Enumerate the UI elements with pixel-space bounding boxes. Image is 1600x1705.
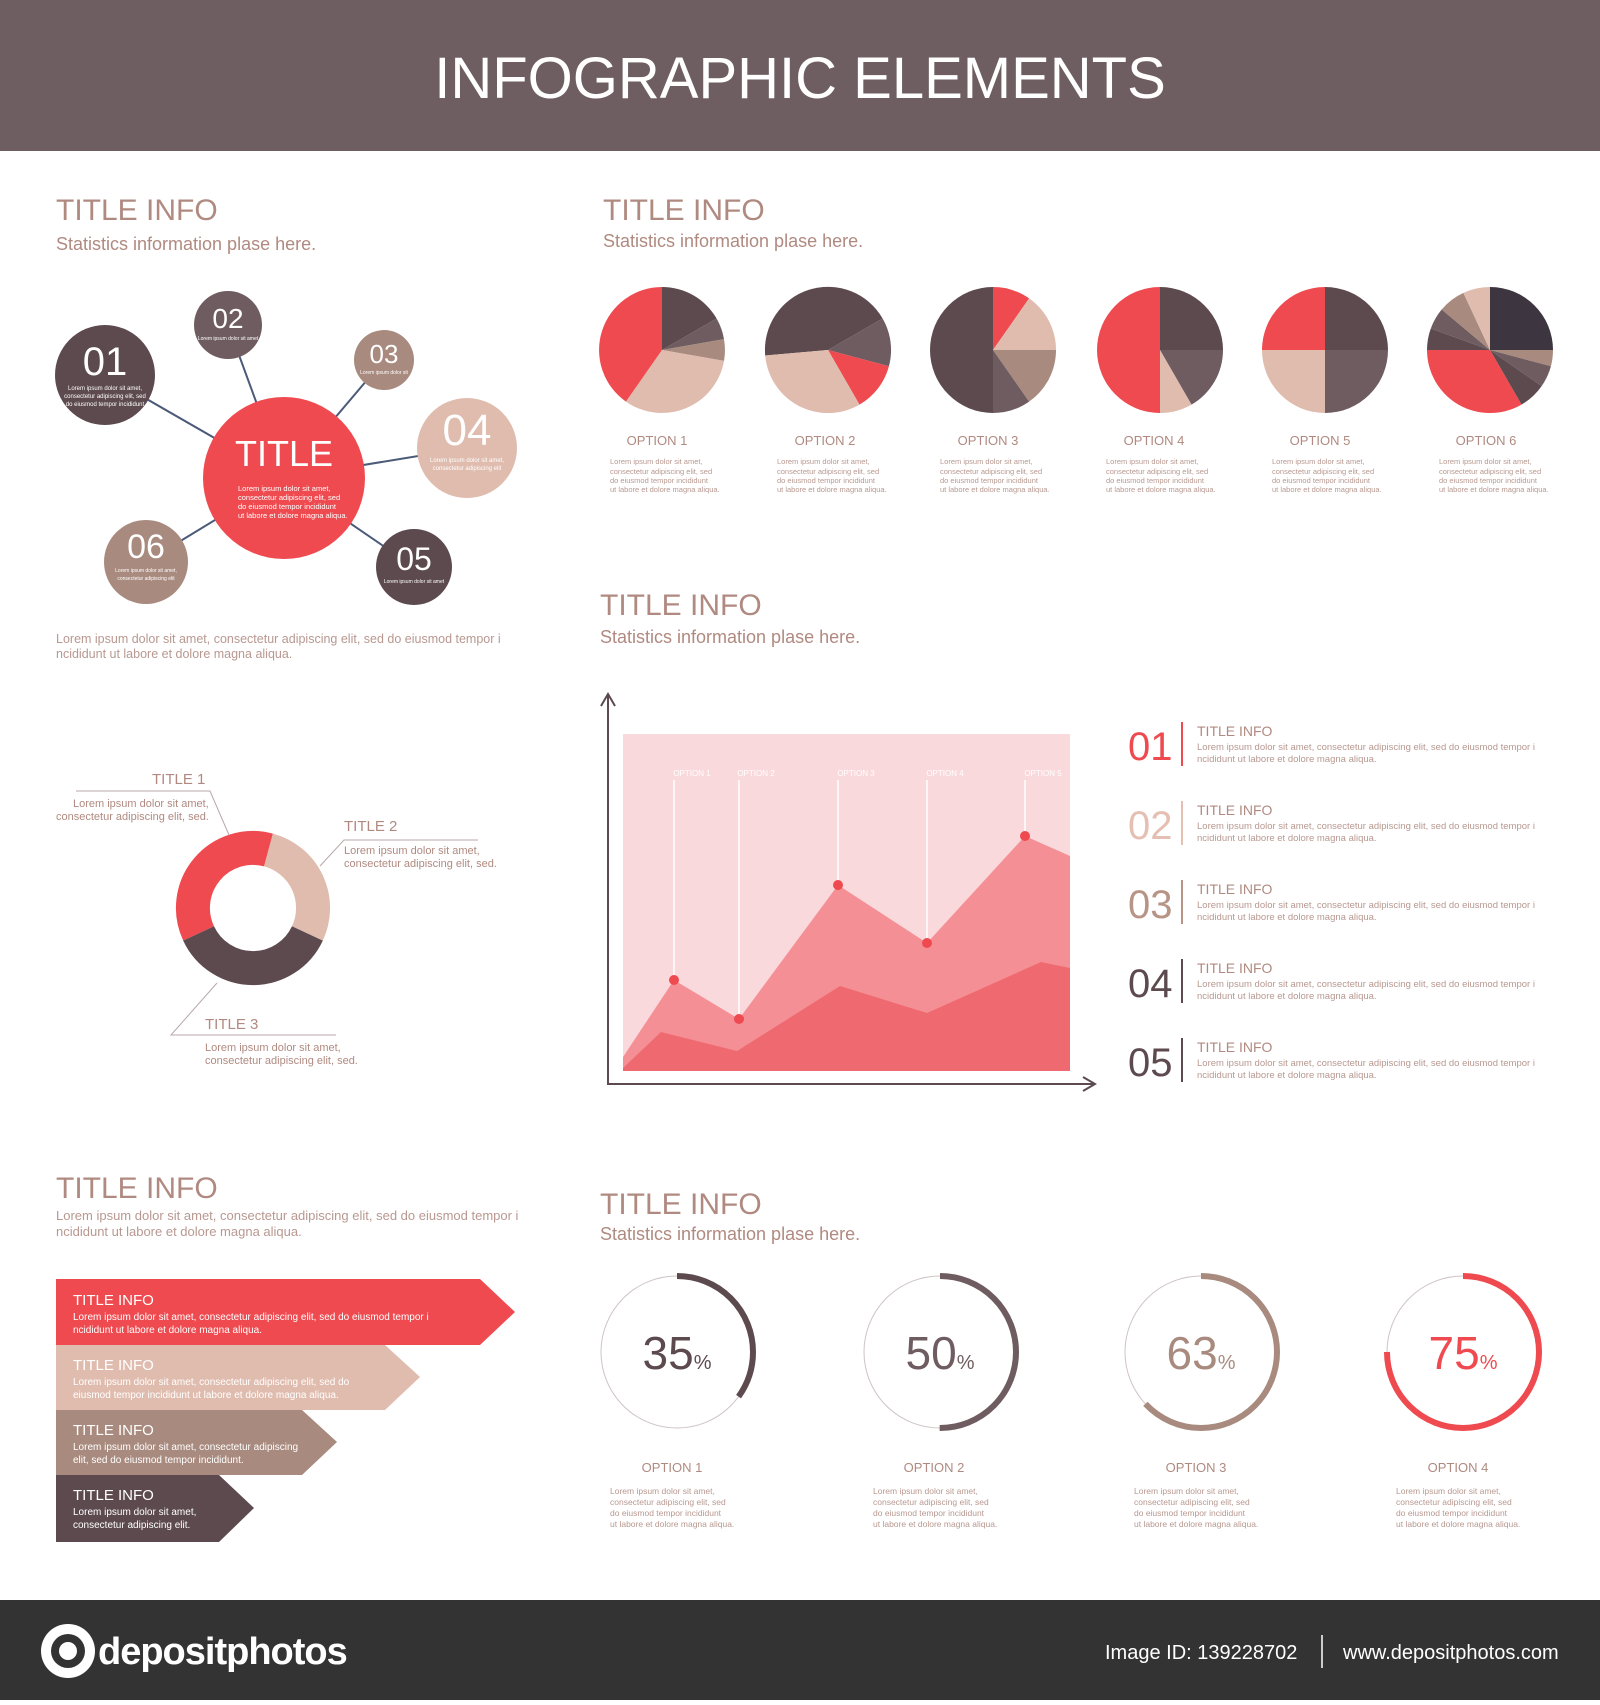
numbered list: TITLE INFO xyxy=(1197,723,1273,739)
pie labels: do eiusmod tempor incididunt xyxy=(1106,476,1205,485)
pie labels: ut labore et dolore magna aliqua. xyxy=(940,485,1050,494)
node 02: Lorem ipsum dolor sit amet xyxy=(198,336,259,342)
progress rings: OPTION 4 xyxy=(1428,1460,1488,1475)
numbered list: 05 xyxy=(1128,1041,1172,1085)
arrow bars: Lorem ipsum dolor sit amet, consectetur adipiscing elit, sed do xyxy=(73,1377,350,1388)
pie labels: OPTION 4 xyxy=(1124,433,1184,448)
section heading: network: Statistics information plase here. xyxy=(56,234,316,254)
progress rings: OPTION 3 xyxy=(1166,1460,1226,1475)
central title node: consectetur adipiscing elit, sed xyxy=(238,493,340,502)
section heading: arrows: ncididunt ut labore et dolore magna aliqua. xyxy=(56,1224,302,1239)
numbered list: TITLE INFO xyxy=(1197,1039,1273,1055)
donut chart xyxy=(56,771,497,1067)
pie labels: do eiusmod tempor incididunt xyxy=(940,476,1039,485)
pie charts row xyxy=(599,287,1553,413)
numbered list xyxy=(1128,722,1535,1085)
pie labels: consectetur adipiscing elit, sed xyxy=(610,467,712,476)
node 01: consectetur adipiscing elit, sed xyxy=(64,394,146,400)
pie labels: ut labore et dolore magna aliqua. xyxy=(777,485,887,494)
donut labels: Lorem ipsum dolor sit amet, xyxy=(205,1042,341,1054)
donut labels: TITLE 2 xyxy=(344,818,397,835)
network diagram xyxy=(55,291,517,605)
progress rings: ut labore et dolore magna aliqua. xyxy=(1134,1519,1258,1529)
area chart xyxy=(601,694,1095,1091)
node 04: 04 xyxy=(443,406,491,455)
progress rings: do eiusmod tempor incididunt xyxy=(610,1508,722,1518)
header bar xyxy=(0,0,1600,151)
donut labels: Lorem ipsum dolor sit amet, xyxy=(344,845,480,857)
progress rings: do eiusmod tempor incididunt xyxy=(1134,1508,1246,1518)
donut labels: TITLE 1 xyxy=(152,771,205,788)
network caption: ncididunt ut labore et dolore magna aliqua. xyxy=(56,647,292,661)
footer bar: Image ID: 139228702 xyxy=(1105,1642,1297,1664)
pie labels: Lorem ipsum dolor sit amet, xyxy=(940,457,1033,466)
node 03 xyxy=(354,330,414,390)
area chart: OPTION 1 xyxy=(673,769,711,778)
progress rings: OPTION 2 xyxy=(904,1460,964,1475)
section heading: pies: Statistics information plase here. xyxy=(603,231,863,251)
arrow bars: Lorem ipsum dolor sit amet, xyxy=(73,1507,196,1518)
arrow bars: TITLE INFO xyxy=(73,1487,154,1504)
numbered list: TITLE INFO xyxy=(1197,960,1273,976)
central title node: ut labore et dolore magna aliqua. xyxy=(238,511,348,520)
central title node: Lorem ipsum dolor sit amet, xyxy=(238,484,331,493)
node 01: Lorem ipsum dolor sit amet, xyxy=(68,386,142,392)
progress rings: Lorem ipsum dolor sit amet, xyxy=(1134,1486,1239,1496)
section heading: progress rings: Statistics information plase here. xyxy=(600,1224,860,1244)
pie labels: Lorem ipsum dolor sit amet, xyxy=(1439,457,1532,466)
pie 4 xyxy=(1097,287,1223,413)
node 01: 01 xyxy=(83,340,127,384)
donut labels: TITLE 3 xyxy=(205,1016,258,1033)
footer bar xyxy=(0,1600,1600,1700)
section heading: area chart xyxy=(600,589,860,647)
progress rings: consectetur adipiscing elit, sed xyxy=(1396,1497,1512,1507)
progress rings xyxy=(601,1276,1539,1529)
axes xyxy=(601,694,1095,1091)
pie labels: OPTION 5 xyxy=(1290,433,1350,448)
numbered list: Lorem ipsum dolor sit amet, consectetur adipiscing elit, sed do eiusmod tempor i xyxy=(1197,979,1535,990)
pie labels: OPTION 6 xyxy=(1456,433,1516,448)
footer bar: www.depositphotos.com xyxy=(1342,1642,1559,1664)
pie 6 xyxy=(1427,287,1553,413)
arrow bars: Lorem ipsum dolor sit amet, consectetur adipiscing xyxy=(73,1442,298,1453)
section heading: arrows: Lorem ipsum dolor sit amet, consectetur adipiscing elit, sed do eiusmod tempor i xyxy=(56,1208,519,1223)
arrow bars: elit, sed do eiusmod tempor incididunt. xyxy=(73,1455,244,1466)
arrow bars: eiusmod tempor incididunt ut labore et dolore magna aliqua. xyxy=(73,1390,339,1401)
pie labels: Lorem ipsum dolor sit amet, xyxy=(1106,457,1199,466)
node 02 xyxy=(194,291,262,359)
arrow bars: Lorem ipsum dolor sit amet, consectetur adipiscing elit, sed do eiusmod tempor i xyxy=(73,1312,429,1323)
pie labels: ut labore et dolore magna aliqua. xyxy=(610,485,720,494)
node 03: Lorem ipsum dolor sit xyxy=(360,370,409,376)
progress rings: consectetur adipiscing elit, sed xyxy=(1134,1497,1250,1507)
node 04: consectetur adipiscing elit xyxy=(433,466,502,472)
arrow bars: consectetur adipiscing elit. xyxy=(73,1520,190,1531)
numbered list: 01 xyxy=(1128,725,1172,769)
progress rings: Lorem ipsum dolor sit amet, xyxy=(873,1486,978,1496)
title: INFOGRAPHIC ELEMENTS xyxy=(434,46,1166,111)
area chart: OPTION 5 xyxy=(1024,769,1062,778)
section heading: progress rings xyxy=(600,1188,860,1244)
pie 5 xyxy=(1262,287,1388,413)
node 01 xyxy=(55,325,155,425)
pie labels: consectetur adipiscing elit, sed xyxy=(1106,467,1208,476)
numbered list: ncididunt ut labore et dolore magna aliqua. xyxy=(1197,1070,1377,1081)
numbered list: Lorem ipsum dolor sit amet, consectetur adipiscing elit, sed do eiusmod tempor i xyxy=(1197,1058,1535,1069)
node 04: Lorem ipsum dolor sit amet, xyxy=(430,458,504,464)
numbered list: Lorem ipsum dolor sit amet, consectetur adipiscing elit, sed do eiusmod tempor i xyxy=(1197,821,1535,832)
pie labels: OPTION 2 xyxy=(795,433,855,448)
icon: camera logo xyxy=(41,1624,95,1678)
pie labels: do eiusmod tempor incididunt xyxy=(610,476,709,485)
progress rings: do eiusmod tempor incididunt xyxy=(1396,1508,1508,1518)
numbered list: 02 xyxy=(1128,804,1172,848)
pie labels: consectetur adipiscing elit, sed xyxy=(940,467,1042,476)
node 03: 03 xyxy=(370,339,398,369)
pie labels: Lorem ipsum dolor sit amet, xyxy=(610,457,703,466)
node 06 xyxy=(104,520,188,604)
numbered list: TITLE INFO xyxy=(1197,802,1273,818)
pie labels: do eiusmod tempor incididunt xyxy=(777,476,876,485)
network caption: Lorem ipsum dolor sit amet, consectetur adipiscing elit, sed do eiusmod tempor i xyxy=(56,632,501,646)
section heading: pies xyxy=(603,194,863,251)
numbered list: ncididunt ut labore et dolore magna aliqua. xyxy=(1197,912,1377,923)
section heading: area chart: Statistics information plase here. xyxy=(600,627,860,647)
numbered list: ncididunt ut labore et dolore magna aliqua. xyxy=(1197,991,1377,1002)
progress rings: ut labore et dolore magna aliqua. xyxy=(610,1519,734,1529)
node 06: 06 xyxy=(127,528,165,566)
pie labels: OPTION 1 xyxy=(627,433,687,448)
section heading: arrows xyxy=(56,1172,519,1239)
arrow bars: TITLE INFO xyxy=(73,1357,154,1374)
pie labels: consectetur adipiscing elit, sed xyxy=(777,467,879,476)
pie labels: ut labore et dolore magna aliqua. xyxy=(1272,485,1382,494)
numbered list: Lorem ipsum dolor sit amet, consectetur adipiscing elit, sed do eiusmod tempor i xyxy=(1197,742,1535,753)
numbered list: ncididunt ut labore et dolore magna aliqua. xyxy=(1197,754,1377,765)
arrow bars: ncididunt ut labore et dolore magna aliqua. xyxy=(73,1325,262,1336)
progress rings: do eiusmod tempor incididunt xyxy=(873,1508,985,1518)
numbered list: Lorem ipsum dolor sit amet, consectetur adipiscing elit, sed do eiusmod tempor i xyxy=(1197,900,1535,911)
pie labels: Lorem ipsum dolor sit amet, xyxy=(1272,457,1365,466)
central title node: TITLE xyxy=(235,433,333,474)
area chart: OPTION 3 xyxy=(837,769,875,778)
progress rings: 75% xyxy=(1429,1327,1498,1379)
central title node: do eiusmod tempor incididunt xyxy=(238,502,337,511)
pie 2 xyxy=(765,287,891,413)
pie labels: do eiusmod tempor incididunt xyxy=(1272,476,1371,485)
pie labels: consectetur adipiscing elit, sed xyxy=(1439,467,1541,476)
donut labels: consectetur adipiscing elit, sed. xyxy=(205,1055,358,1067)
progress rings: 35% xyxy=(643,1327,712,1379)
arrow bars: TITLE INFO xyxy=(73,1422,154,1439)
area chart: OPTION 4 xyxy=(926,769,964,778)
footer bar: depositphotos xyxy=(98,1631,347,1673)
progress rings: consectetur adipiscing elit, sed xyxy=(873,1497,989,1507)
node 05 xyxy=(376,529,452,605)
pie labels: ut labore et dolore magna aliqua. xyxy=(1106,485,1216,494)
progress rings: ut labore et dolore magna aliqua. xyxy=(1396,1519,1520,1529)
pie labels: do eiusmod tempor incididunt xyxy=(1439,476,1538,485)
node 04 xyxy=(417,398,517,498)
numbered list: 03 xyxy=(1128,883,1172,927)
node 05: Lorem ipsum dolor sit amet xyxy=(384,579,445,585)
progress rings: Lorem ipsum dolor sit amet, xyxy=(610,1486,715,1496)
progress rings: OPTION 1 xyxy=(642,1460,702,1475)
area chart: OPTION 2 xyxy=(737,769,775,778)
pie labels: consectetur adipiscing elit, sed xyxy=(1272,467,1374,476)
central title node xyxy=(203,397,365,559)
pie labels: OPTION 3 xyxy=(958,433,1018,448)
donut labels: consectetur adipiscing elit, sed. xyxy=(344,858,497,870)
node 05: 05 xyxy=(396,541,432,577)
section heading: progress rings: TITLE INFO xyxy=(600,1188,762,1221)
numbered list: ncididunt ut labore et dolore magna aliqua. xyxy=(1197,833,1377,844)
node 06: Lorem ipsum dolor sit amet, xyxy=(115,568,177,574)
section heading: network xyxy=(56,194,316,254)
section heading: area chart: TITLE INFO xyxy=(600,589,762,622)
progress rings: consectetur adipiscing elit, sed xyxy=(610,1497,726,1507)
progress rings: 63% xyxy=(1167,1327,1236,1379)
progress rings: Lorem ipsum dolor sit amet, xyxy=(1396,1486,1501,1496)
section heading: arrows: TITLE INFO xyxy=(56,1172,218,1205)
progress rings: ut labore et dolore magna aliqua. xyxy=(873,1519,997,1529)
numbered list: TITLE INFO xyxy=(1197,881,1273,897)
node 01: do eiusmod tempor incididunt xyxy=(66,402,145,408)
section heading: network: TITLE INFO xyxy=(56,194,218,227)
progress rings: 50% xyxy=(906,1327,975,1379)
node 06: consectetur adipiscing elit xyxy=(117,576,175,582)
arrow bars: TITLE INFO xyxy=(73,1292,154,1309)
donut labels: consectetur adipiscing elit, sed. xyxy=(56,811,209,823)
node 02: 02 xyxy=(212,303,244,334)
arrow bars xyxy=(56,1279,515,1542)
pie labels xyxy=(610,433,1549,494)
pie 1 xyxy=(599,287,725,413)
pie labels: ut labore et dolore magna aliqua. xyxy=(1439,485,1549,494)
donut labels: Lorem ipsum dolor sit amet, xyxy=(73,798,209,810)
pie 3 xyxy=(930,287,1056,413)
pie labels: Lorem ipsum dolor sit amet, xyxy=(777,457,870,466)
numbered list: 04 xyxy=(1128,962,1172,1006)
donut labels xyxy=(56,771,497,1067)
network caption xyxy=(56,632,501,661)
section heading: pies: TITLE INFO xyxy=(603,194,765,227)
